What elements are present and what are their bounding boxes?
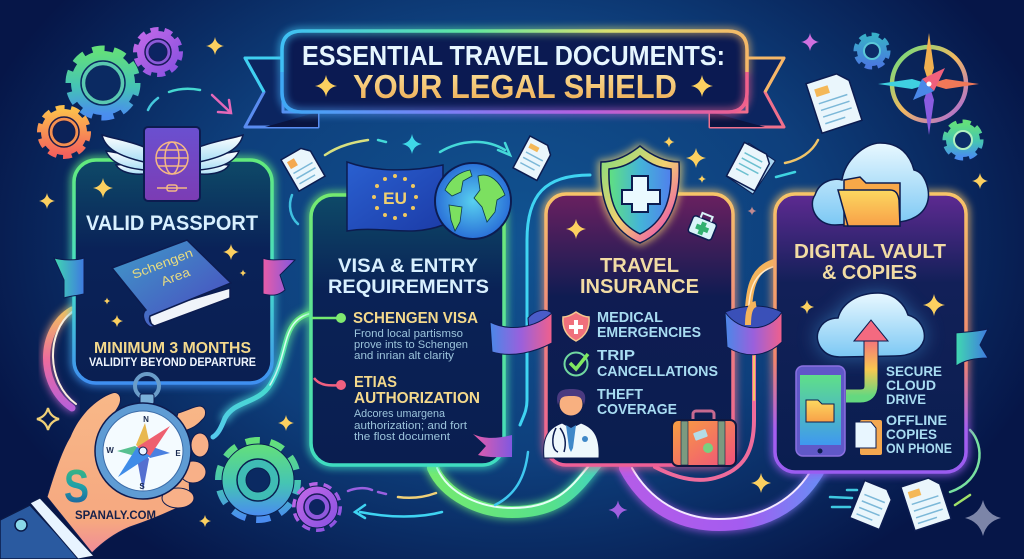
bullet: etias: authorization; and fort <box>354 420 467 432</box>
orange link above vault ribbon <box>748 262 776 325</box>
compass body: W <box>106 446 114 455</box>
doc near insurance <box>513 136 554 180</box>
medical bag <box>687 210 719 241</box>
offline copies text <box>886 413 952 456</box>
title line 2: YOUR LEGAL SHIELD <box>353 68 677 105</box>
doctor <box>544 389 599 458</box>
sparkles <box>800 294 945 316</box>
title line 1: ESSENTIAL TRAVEL DOCUMENTS: <box>302 40 725 71</box>
arrow back to gears <box>355 505 442 518</box>
offline copies text: COPIES <box>886 427 937 442</box>
item: theft: COVERAGE <box>597 401 677 418</box>
doc near visa <box>281 145 325 191</box>
panel: travel insurance: INSURANCE <box>580 276 699 298</box>
cyan line around insurance panel <box>520 175 590 425</box>
wing right <box>199 135 243 174</box>
dashed path accents <box>148 89 980 507</box>
offline copies text: ON PHONE <box>886 441 952 456</box>
compass ring <box>135 374 159 404</box>
logo: S <box>64 460 89 512</box>
panel: travel insurance <box>544 143 736 466</box>
compass body <box>95 403 191 499</box>
ribbon at bottom right <box>473 434 512 457</box>
bullet: etias <box>314 374 480 443</box>
bullet: schengen <box>312 310 478 362</box>
title sparkle left <box>315 75 337 97</box>
wing left <box>102 135 144 174</box>
panel: digital vault: & COPIES <box>822 262 917 284</box>
offline copies text: OFFLINE <box>886 413 947 428</box>
ribbon right <box>263 258 295 295</box>
title sparkle right <box>691 75 713 97</box>
gear: right green <box>945 122 981 158</box>
offline copies icon <box>855 420 882 455</box>
compass rose <box>878 33 979 135</box>
passport <box>144 127 200 201</box>
sparkles <box>93 178 246 327</box>
gear: orange <box>40 108 88 156</box>
doc bottom two <box>901 475 951 531</box>
globe <box>435 163 511 239</box>
ribbon right <box>956 329 988 366</box>
minimum months text: MINIMUM 3 MONTHS <box>94 340 251 357</box>
item: medical: EMERGENCIES <box>597 324 701 341</box>
link from passport to visa <box>213 313 312 437</box>
item: theft: THEFT <box>597 386 643 403</box>
flow ribbons <box>46 175 818 525</box>
bottom rainbow wave <box>433 437 672 512</box>
suitcase <box>672 411 736 466</box>
ribbon band: insurance to vault <box>725 304 782 355</box>
panel: visa and entry: REQUIREMENTS <box>328 277 489 298</box>
item: trip: CANCELLATIONS <box>597 363 718 380</box>
hand <box>47 393 206 553</box>
bullet: etias: AUTHORIZATION <box>354 390 480 407</box>
doc bottom one <box>850 480 894 530</box>
EU flag <box>347 162 443 231</box>
cuff <box>30 498 94 559</box>
gear: top green <box>69 49 137 117</box>
gear: bottom green <box>219 441 297 519</box>
secure cloud text: DRIVE <box>886 392 926 407</box>
secure cloud text: SECURE <box>886 364 942 379</box>
hand holding compass <box>0 374 209 559</box>
panel: valid passport <box>54 127 295 383</box>
heading: VISA & ENTRY <box>338 256 478 277</box>
item: trip <box>564 347 718 380</box>
item: theft <box>597 386 677 418</box>
bullet: etias: the flost document <box>354 431 450 443</box>
ribbon left <box>54 258 84 298</box>
validity text: VALIDITY BEYOND DEPARTURE <box>89 355 256 369</box>
EU flag: EU <box>383 189 407 208</box>
bullet: schengen: SCHENGEN VISA <box>353 310 478 327</box>
fingers <box>162 433 209 508</box>
bullet: schengen: Frond local partismso <box>354 328 463 340</box>
doc stack <box>725 141 777 196</box>
phone <box>796 366 845 456</box>
panel: visa and entry <box>311 162 512 465</box>
heading: VALID PASSPORT <box>86 212 258 235</box>
site url: SPANALY.COM <box>75 510 156 522</box>
gear: top purple <box>136 30 180 74</box>
upload cloud <box>817 293 924 357</box>
bullet: schengen: prove ints to Schengen <box>354 339 468 351</box>
arc left of passport panel <box>46 310 76 408</box>
cloud with folder <box>812 143 928 226</box>
book: Schengen Area: Schengen <box>130 246 195 282</box>
ribbon band: visa to insurance <box>490 310 552 354</box>
sparkle <box>566 219 586 239</box>
ribbon tails <box>245 58 784 127</box>
compass body: N <box>143 415 149 424</box>
item: trip: TRIP <box>597 347 635 364</box>
upload arrow <box>846 320 888 396</box>
heading: TRAVEL <box>600 255 679 277</box>
document icons <box>281 71 951 531</box>
compass body: E <box>175 449 181 458</box>
bullet: etias: ETIAS <box>354 374 397 391</box>
bullet: etias: Adcores umargena <box>354 408 446 420</box>
sleeve <box>0 505 80 559</box>
pink bracket between insurance and vault <box>655 350 754 480</box>
book: Schengen Area: Area <box>159 265 192 289</box>
panel: digital vault <box>775 143 988 472</box>
book: Schengen Area <box>112 240 231 327</box>
doc top right <box>806 71 862 133</box>
title banner <box>245 31 784 127</box>
bullet: schengen: and inrian alt clarity <box>354 350 455 362</box>
shield <box>598 143 682 246</box>
item: medical <box>563 309 701 341</box>
cyan lower line <box>495 452 528 505</box>
gear: bottom purple <box>295 485 339 529</box>
gear: top right blue <box>856 35 888 67</box>
compass body: S <box>139 482 145 491</box>
secure cloud text: CLOUD <box>886 378 936 393</box>
heading: DIGITAL VAULT <box>794 241 946 263</box>
item: medical: MEDICAL <box>597 309 663 326</box>
purple U wave <box>625 468 818 525</box>
secure cloud text <box>886 364 942 407</box>
